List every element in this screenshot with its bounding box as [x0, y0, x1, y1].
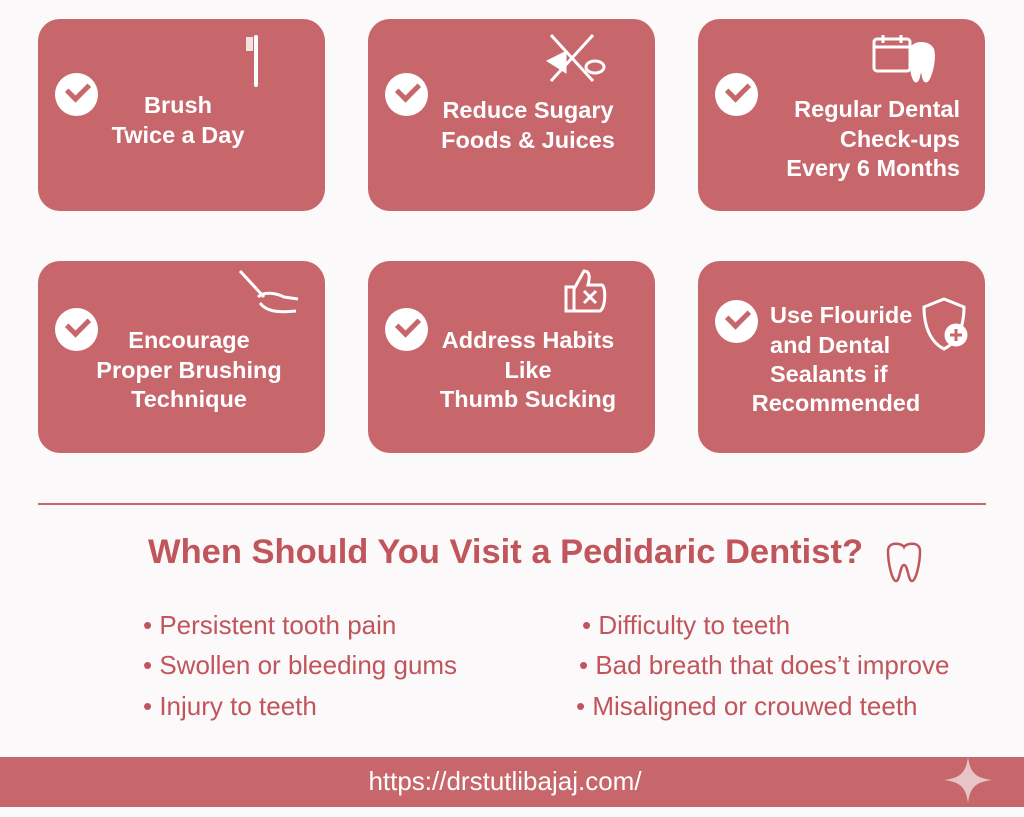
icon: toothbrush [246, 35, 258, 87]
icon: check [715, 300, 758, 343]
text: • Swollen or bleeding gums [143, 650, 457, 680]
text: Reduce Sugary [442, 97, 614, 123]
text: recommended: Recommended [752, 390, 920, 416]
divider line [38, 503, 986, 505]
icon: check [55, 73, 98, 116]
text [440, 327, 616, 412]
text [96, 327, 282, 412]
text: Twice a Day [112, 122, 244, 148]
text: Use Flouride [770, 302, 912, 328]
icon: check [385, 73, 428, 116]
text: • Difficulty to teeth [582, 610, 790, 640]
text: Check-ups [840, 126, 960, 152]
text: • Injury to teeth [143, 691, 317, 721]
text [786, 96, 960, 181]
text: Thumb Sucking [440, 386, 616, 412]
card: flouride sealants [698, 261, 985, 453]
text: and Dental [770, 332, 890, 358]
text: Foods & Juices [441, 126, 615, 152]
text: Address Habits [442, 327, 614, 353]
card: brush twice a day [38, 19, 325, 211]
footer bar [0, 757, 1024, 807]
icon: no sweets [546, 34, 606, 82]
text: Regular Dental [794, 96, 960, 122]
icon: hand toothbrush [239, 270, 298, 314]
text: Proper Brushing [96, 356, 282, 382]
icon: tooth [886, 542, 922, 582]
card: address habits [368, 261, 655, 453]
icon: check [55, 308, 98, 351]
heading: When Should You Visit a Pedidaric Dentist? [148, 533, 863, 571]
icon: calendar tooth [872, 35, 935, 82]
card: proper brushing [38, 261, 325, 453]
text: Sealants if [770, 361, 888, 387]
bullet list left [143, 610, 457, 721]
text [441, 97, 615, 152]
text: Brush [144, 92, 212, 118]
card: dental check-ups [698, 19, 985, 211]
bullet list right [576, 610, 949, 721]
text [112, 92, 244, 148]
icon: shield tooth [922, 297, 968, 351]
text: Encourage [128, 327, 250, 353]
icon: check [385, 308, 428, 351]
text: • Bad breath that does’t improve [579, 650, 949, 680]
icon: thumb x [564, 270, 606, 312]
icon: check [715, 73, 758, 116]
text: Like [504, 356, 552, 382]
card: reduce sugary [368, 19, 655, 211]
text [770, 302, 912, 387]
icon: sparkle [944, 758, 992, 802]
footer url: https://drstutlibajaj.com/ [368, 766, 642, 796]
text: Every 6 Months [786, 155, 960, 181]
text: • Persistent tooth pain [143, 610, 396, 640]
text: Technique [131, 386, 247, 412]
text: • Misaligned or crouwed teeth [576, 691, 918, 721]
